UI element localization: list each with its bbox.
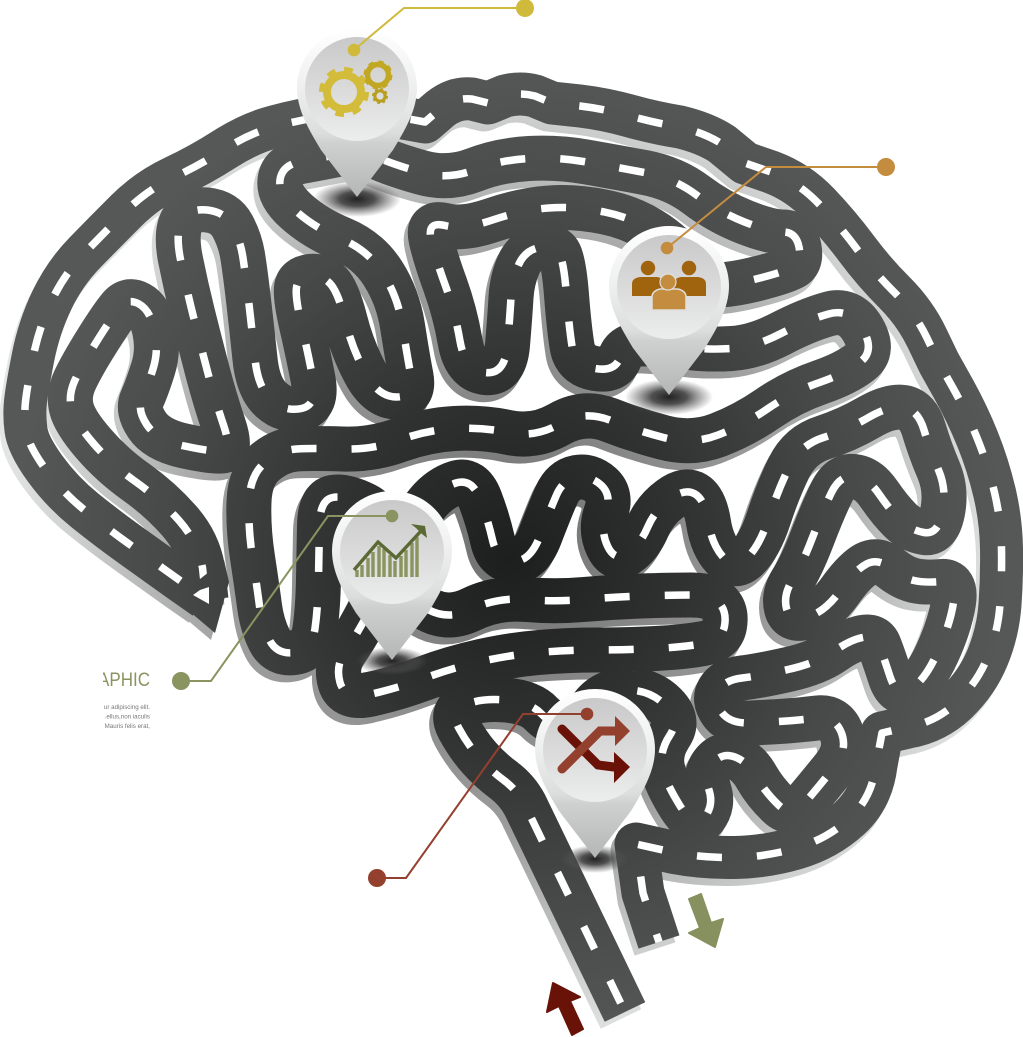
pin 3 disc <box>340 500 444 604</box>
pin 4 disc <box>543 698 647 802</box>
pin 2 disc <box>617 235 721 339</box>
body text fragment: ur adipiscing elit. <box>104 704 150 711</box>
icon: shuffle <box>562 716 630 783</box>
body text fragment: Mauris felis erat, <box>105 723 150 730</box>
connector: red shuffle callout <box>368 708 593 887</box>
connector: olive chart callout <box>172 510 398 690</box>
pin 1 ground shadow <box>313 181 401 217</box>
icon: rising chart <box>354 524 427 577</box>
body text fragment <box>104 704 150 730</box>
connector: orange team callout <box>661 158 895 254</box>
pin 2 body <box>609 226 729 395</box>
pin 4: shuffle arrows <box>535 689 655 873</box>
body text fragment: .ellus,non iaculis <box>105 714 150 720</box>
icon: gears <box>322 62 391 114</box>
pin 1: gears <box>297 28 417 217</box>
pin 3 ground shadow <box>356 647 428 675</box>
connector: gold gears callout <box>348 0 534 56</box>
pin 2: team <box>609 226 729 415</box>
pin 3: growth chart <box>332 491 452 675</box>
icon: team of people <box>632 261 706 310</box>
pin 4 body <box>535 689 655 858</box>
heading fragment: APHIC <box>98 670 150 691</box>
pin 1 disc <box>305 37 409 141</box>
pin 2 ground shadow <box>625 379 713 415</box>
arrow: exit, olive green <box>689 894 723 947</box>
pin 1 body <box>297 28 417 197</box>
road end tip <box>183 560 229 633</box>
arrow: entry, dark red <box>547 983 583 1035</box>
pin 4 ground shadow <box>561 845 629 873</box>
pin 3 body <box>332 491 452 660</box>
